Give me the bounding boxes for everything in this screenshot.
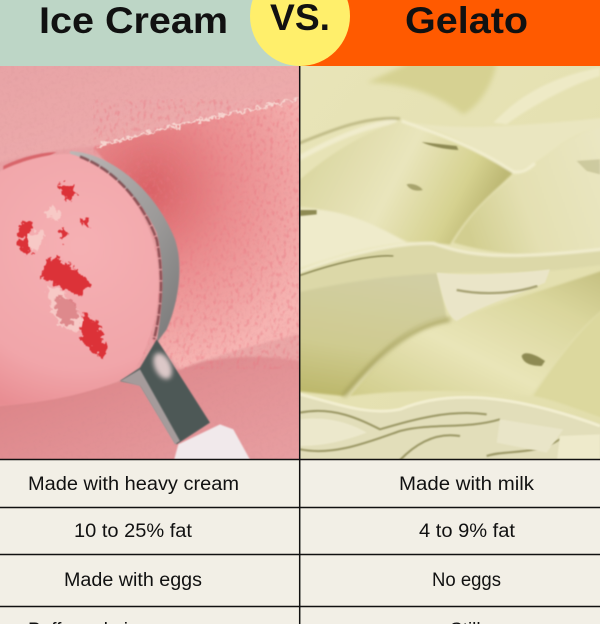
photo: ice cream scoop [0, 59, 307, 466]
slab grain [0, 66, 300, 460]
row 4: texture, cropped by the page edge [28, 620, 481, 624]
right fold [426, 118, 600, 170]
pink shading inside the ripple [55, 296, 79, 328]
red ripple [17, 183, 108, 357]
header: gelato side [300, 0, 600, 66]
ruffle highlights [300, 418, 600, 463]
ruffled bottom [306, 400, 600, 458]
wall specks [93, 99, 300, 369]
lobe lower centre [350, 269, 600, 396]
crumbly white flecks [27, 206, 83, 331]
handle neck [120, 339, 210, 444]
ridge fold line [402, 121, 535, 172]
top fold shadow [367, 63, 497, 114]
row 2: fat content [74, 521, 516, 542]
row 1: ingredient base: Made with milk [399, 474, 535, 495]
valley shadow [343, 319, 450, 396]
handle highlight [149, 350, 176, 382]
header: ice cream side [0, 0, 300, 66]
air holes [300, 142, 600, 366]
scoop rim [70, 151, 179, 343]
ice cream ball [0, 154, 159, 406]
row 1: ingredient base [28, 474, 535, 495]
carved wall [93, 99, 307, 369]
photo: gelato swirls [297, 63, 600, 463]
ruffle creases [300, 411, 560, 460]
heading: Gelato: Gelato [405, 0, 528, 41]
lobe right lower [533, 306, 600, 419]
top slab of ice cream [0, 66, 299, 160]
torn edge [97, 99, 298, 146]
band shadow line [300, 256, 393, 275]
backing colour [0, 145, 180, 406]
row 2: fat content: 10 to 25% fat [74, 521, 193, 542]
row 3: eggs: No eggs [432, 570, 501, 591]
heading: Ice Cream: Ice Cream [39, 0, 228, 41]
VS badge [250, 0, 350, 66]
lobe lower left [297, 273, 447, 396]
thick band [297, 244, 600, 293]
row 2: fat content: 4 to 9% fat [419, 521, 516, 542]
bottom slab [0, 356, 299, 459]
table: comparison rows [0, 459, 600, 624]
lobe right [453, 126, 600, 255]
red smear behind scoop [2, 152, 56, 170]
lobe light left [297, 209, 407, 269]
row 3: eggs: Made with eggs [64, 570, 202, 591]
white handle [173, 424, 252, 463]
lobe upper left [297, 121, 513, 244]
pocket fold [437, 269, 550, 321]
gelato base [300, 66, 600, 460]
scoop inner shadow [80, 157, 161, 339]
row 1: ingredient base: Made with heavy cream [28, 474, 239, 495]
row 3: eggs [64, 570, 501, 591]
